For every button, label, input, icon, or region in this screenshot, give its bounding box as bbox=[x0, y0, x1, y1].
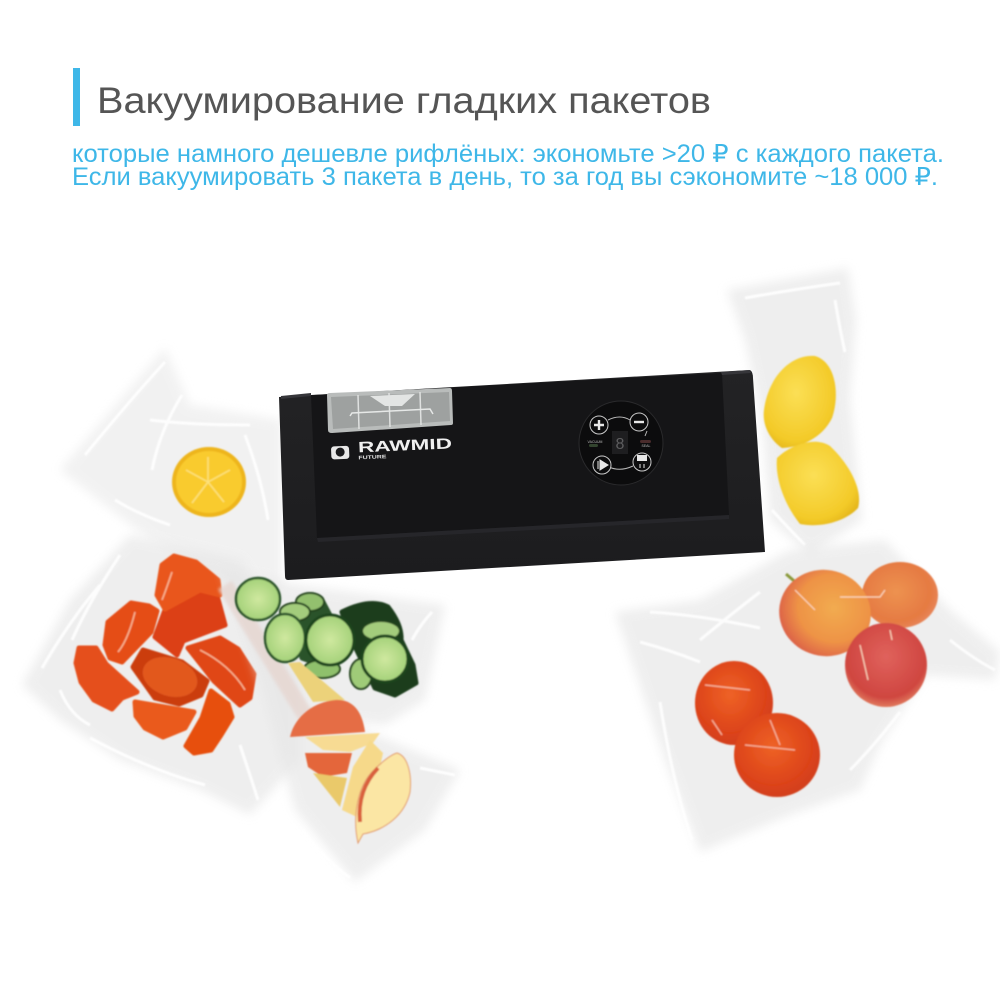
cucumber slices bbox=[236, 578, 416, 695]
sealer lid bbox=[311, 373, 729, 538]
bag: lemon half bbox=[60, 348, 282, 590]
button: minus bbox=[630, 413, 648, 431]
subtitle text bbox=[72, 140, 944, 191]
title: Вакуумирование гладких пакетов bbox=[97, 80, 711, 121]
icon: lemons bbox=[764, 356, 859, 525]
button: plus bbox=[590, 416, 608, 434]
button: play bbox=[593, 456, 611, 474]
bag: apples and tomatoes bbox=[615, 540, 1000, 852]
logo: RAWMID bbox=[358, 435, 453, 456]
tomatoes bbox=[695, 661, 820, 797]
logo: FUTURE bbox=[358, 454, 387, 461]
subtitle text: которые намного дешевле рифлёных: экономьте >20 ₽ с каждого пакета. bbox=[72, 140, 944, 168]
sealer body bbox=[279, 370, 765, 580]
title accent bar bbox=[73, 68, 80, 126]
bag: lemons bbox=[727, 268, 862, 555]
seal label: SEAL bbox=[642, 444, 651, 448]
subtitle text: Если вакуумировать 3 пакета в день, то за год вы сэкономите ~18 000 ₽. bbox=[72, 163, 938, 191]
bag: tomatoes bbox=[22, 535, 300, 815]
apples bbox=[769, 560, 938, 707]
bag: cucumber and apple slices bbox=[222, 570, 460, 882]
display bbox=[612, 431, 628, 454]
vacuum sealer bbox=[279, 370, 765, 580]
logo bbox=[331, 435, 453, 462]
button: seal pause bbox=[633, 453, 651, 471]
tomato wedges bbox=[76, 556, 254, 753]
vacuum label: VACUUM bbox=[588, 440, 603, 444]
control panel: 8 bbox=[616, 436, 625, 453]
icon: lemon half bbox=[172, 447, 246, 517]
control panel bbox=[579, 401, 663, 485]
apple slices bbox=[288, 662, 410, 843]
transparent window bbox=[327, 388, 453, 433]
